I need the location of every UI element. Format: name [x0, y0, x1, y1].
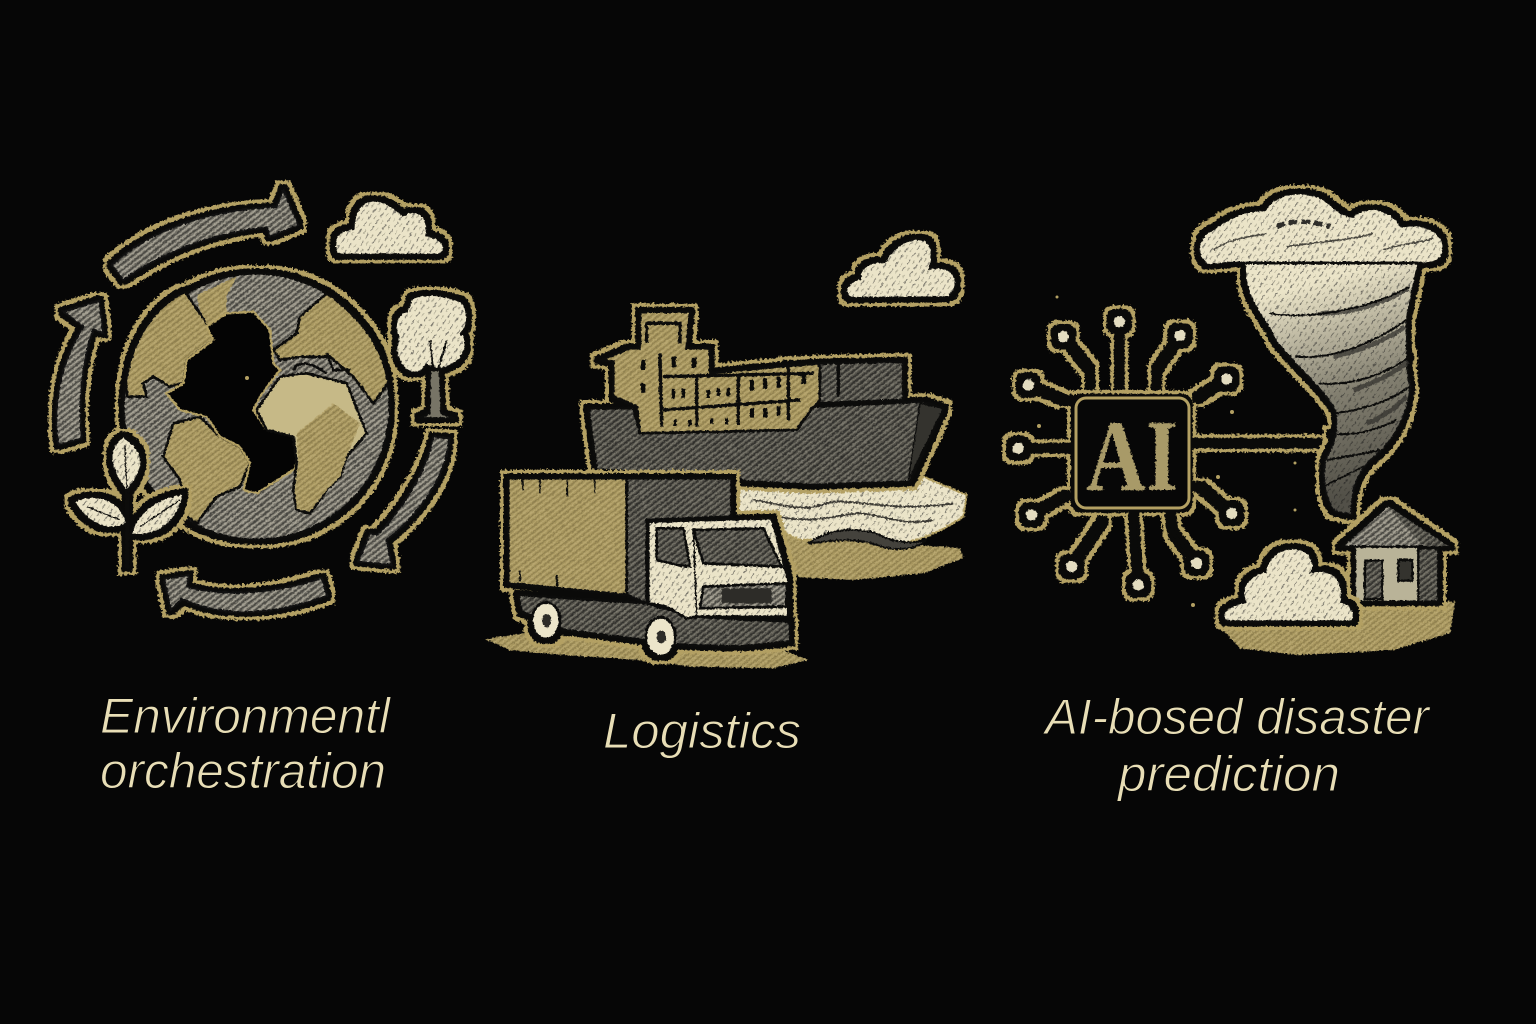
specks	[1037, 296, 1296, 607]
icon: circular arrows	[56, 190, 449, 612]
icon: plant leaves	[73, 437, 183, 568]
icon: container ship	[588, 312, 943, 485]
icon: ground under house	[1217, 602, 1455, 655]
icon: tree	[396, 295, 467, 418]
label: AI-bosed disaster prediction: AI-bosed disaster	[1042, 689, 1431, 745]
panel: logistics	[485, 239, 967, 668]
label: AI-bosed disaster prediction: prediction	[1116, 746, 1340, 802]
panel: AI-based disaster prediction	[1009, 193, 1455, 655]
icon: ground under truck	[485, 623, 808, 668]
icon: tornado and storm cloud	[1199, 193, 1444, 515]
icon: cloud	[335, 200, 444, 255]
icon: waves	[737, 477, 967, 580]
icon: small cloud	[1223, 548, 1354, 622]
label: Environmentl orchestration: orchestration	[100, 743, 386, 799]
label: Environmentl orchestration	[100, 688, 392, 799]
icon: delivery truck	[508, 477, 790, 656]
icon: AI chip with circuit traces	[1009, 312, 1328, 594]
icon: house	[1342, 505, 1448, 602]
icon: cloud	[846, 239, 956, 298]
label: Environmentl orchestration: Environmentl	[100, 688, 392, 744]
label: AI-bosed disaster prediction	[1042, 689, 1431, 802]
speck	[245, 376, 249, 380]
label: Logistics: Logistics	[603, 703, 801, 759]
label: AI: AI	[1086, 400, 1178, 513]
panel: environmental orchestration	[56, 190, 467, 612]
icon: globe	[123, 273, 390, 540]
